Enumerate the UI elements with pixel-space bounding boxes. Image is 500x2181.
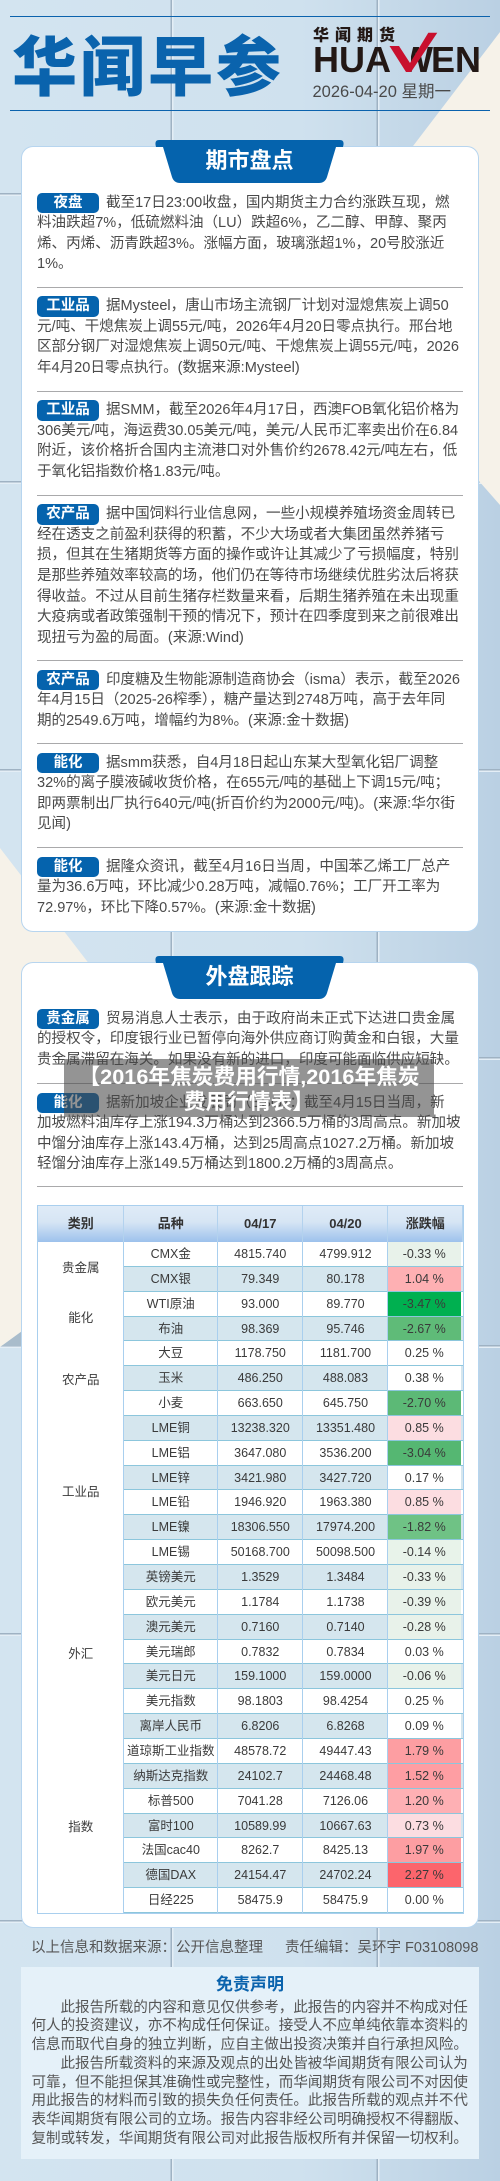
row: 布油	[124, 1317, 462, 1341]
row: 澳元美元: 澳元美元	[146, 1620, 196, 1634]
row: 布油: -2.67 %	[403, 1322, 446, 1336]
disclaimer text: 此报告所载的内容和意见仅供参考，此报告的内容并不构成对任	[60, 2000, 468, 2016]
row: 标普500	[124, 1789, 462, 1814]
row: 日经225: 0.00 %	[405, 1893, 444, 1907]
news item: 夜盘: 烯、丙烯、沥青跌超3%。涨幅方面，玻璃涨超1%，20号胶涨近	[37, 236, 444, 252]
news item: 农产品 印度糖: 期的2549.6万吨，增幅约为8%。(来源:金十数据)	[37, 713, 349, 729]
row: 富时100: 富时100	[148, 1819, 194, 1833]
disclaimer text: 信息而取代自身的独立判断，应自主做出投资决策并自行承担风险。	[32, 2037, 468, 2053]
news item: 夜盘	[37, 193, 450, 272]
row: 德国DAX: 2.27 %	[405, 1868, 444, 1882]
row: 玉米: 玉米	[158, 1371, 183, 1385]
table group: 农产品	[38, 1341, 462, 1416]
row: LME铜: 13238.320	[231, 1421, 290, 1435]
row: 富时100: 10667.63	[319, 1819, 372, 1833]
row: 美元指数: 98.4254	[323, 1694, 368, 1708]
row: LME铜: LME铜	[152, 1421, 190, 1435]
table header: 04/20	[329, 1216, 362, 1231]
row: LME镍: 18306.550	[231, 1520, 290, 1534]
row: 大豆	[124, 1341, 462, 1366]
row: LME锌: 0.17 %	[405, 1471, 444, 1485]
table group: 外汇: 外汇	[68, 1647, 93, 1661]
row: 玉米: 0.38 %	[405, 1371, 444, 1385]
row: 美元日元: 159.1000	[234, 1669, 286, 1683]
news item: 能化 新加坡: 中馏分油库存上涨143.4万桶，达到25周高点1027.2万桶。新加坡	[37, 1136, 454, 1152]
row: LME铅: 0.85 %	[405, 1495, 444, 1509]
row: LME镍: 17974.200	[316, 1520, 375, 1534]
news item: 能化 苯乙烯: 72.97%，环比下降0.57%。(来源:金十数据)	[37, 900, 316, 916]
news item: 工业品 SMM: 306美元/吨，海运费30.05美元/吨，美元/人民币汇率卖出价在6.84	[37, 423, 458, 439]
news item: 能化 新加坡	[37, 1093, 461, 1172]
row: 法国cac40: 8262.7	[241, 1843, 279, 1857]
overlay caption	[64, 1059, 434, 1117]
row: 英镑美元: 1.3529	[241, 1570, 279, 1584]
logo: Huawen Futures	[313, 22, 481, 80]
row: 美元日元	[124, 1664, 462, 1689]
table header	[38, 1206, 462, 1242]
news item: 农产品 饲料: 大疫病或者政策强制干预的情况下，预计在四季度到来之前很难出	[37, 609, 459, 625]
news item: 能化 苯乙烯: 据隆众资讯，截至4月16日当周，中国苯乙烯工厂总产	[106, 859, 450, 875]
news item: 工业品 SMM: 工业品	[46, 402, 90, 418]
table header: 类别	[68, 1216, 94, 1231]
row: CMX银: 1.04 %	[405, 1272, 444, 1286]
row: CMX金: CMX金	[151, 1247, 191, 1261]
row: LME铅: 1946.920	[234, 1495, 286, 1509]
news item: 农产品 印度糖: 印度糖及生物能源制造商协会（isma）表示，截至2026	[106, 672, 460, 688]
row: 小麦: 663.650	[238, 1396, 283, 1410]
news item: 农产品 印度糖	[37, 670, 460, 729]
row: 纳斯达克指数: 纳斯达克指数	[133, 1769, 208, 1783]
table header: 04/17	[244, 1216, 277, 1231]
row: 标普500: 7041.28	[238, 1794, 283, 1808]
row: WTI原油: WTI原油	[147, 1297, 195, 1311]
row: 美元指数: 0.25 %	[405, 1694, 444, 1708]
news item: 夜盘: 1%。	[37, 256, 73, 272]
news item: 贵金属	[37, 1009, 459, 1068]
row: CMX银	[124, 1267, 462, 1292]
row: CMX金: 4815.740	[234, 1247, 286, 1261]
row: CMX金	[124, 1242, 462, 1267]
row: LME锌	[124, 1466, 462, 1490]
row: LME锡	[124, 1540, 462, 1565]
news item: 能化 烧碱: 据smm获悉，自4月18日起山东某大型氧化铝厂调整	[106, 755, 438, 771]
row: 道琼斯工业指数	[124, 1739, 462, 1764]
row: 纳斯达克指数: 1.52 %	[405, 1769, 444, 1783]
row: 小麦: -2.70 %	[403, 1396, 446, 1410]
news item: 贵金属: 的授权令，印度银行业已暂停向海外供应商订购黄金和白银，大量	[37, 1031, 459, 1047]
news item: 工业品 SMM: 据SMM，截至2026年4月17日，西澳FOB氧化铝价格为	[106, 402, 459, 418]
table header: 品种	[158, 1216, 184, 1231]
panel: disclaimer	[21, 1967, 479, 2159]
table group: 农产品: 农产品	[62, 1373, 100, 1387]
row: 大豆: 1178.750	[235, 1346, 286, 1360]
row: 澳元美元: -0.28 %	[403, 1620, 446, 1634]
row: 布油: 98.369	[241, 1322, 279, 1336]
news item: 农产品 印度糖: 年4月15日（2025-26榨季），糖产量达到2748万吨，高于去年同	[37, 692, 445, 708]
source credit: 以上信息和数据来源：公开信息整理	[31, 1940, 263, 1956]
disclaimer text: 何人的投资建议，亦不构成任何保证。接受人不应单纯依靠本资料的	[32, 2018, 468, 2034]
row: 美元瑞郎: 0.03 %	[405, 1645, 444, 1659]
row: 德国DAX: 24154.47	[234, 1868, 286, 1882]
row: WTI原油: -3.47 %	[403, 1297, 446, 1311]
row: 德国DAX: 24702.24	[319, 1868, 372, 1882]
disclaimer text: 表华闻期货有限公司的立场。报告内容非经公司明确授权不得翻版、	[32, 2112, 468, 2128]
row: 英镑美元: -0.33 %	[403, 1570, 446, 1584]
news item: 能化 新加坡: 轻馏分油库存上涨149.5万桶达到1800.2万桶的3周高点。	[37, 1156, 402, 1172]
heading tab: 外盘跟踪: 外盘跟踪	[205, 964, 294, 989]
news item: 农产品 饲料: 是那些养殖效率较高的场，他们仍在等待市场继续优胜劣汰后将获	[37, 568, 459, 584]
row: LME锡: -0.14 %	[403, 1545, 446, 1559]
row: LME镍: -1.82 %	[403, 1520, 446, 1534]
row: LME锡: 50168.700	[231, 1545, 290, 1559]
disclaimer text: 此报告所载资料的来源及观点的出处皆被华闻期货有限公司认为	[60, 2056, 468, 2072]
news item: 能化 烧碱: 32%的离子膜液碱收货价格，在655元/吨的基础上下调15元/吨；	[37, 775, 449, 791]
row: 富时100	[124, 1814, 462, 1838]
row: 美元日元: 159.0000	[319, 1669, 372, 1683]
row: 标普500: 1.20 %	[405, 1794, 444, 1808]
row: LME铝: -3.04 %	[403, 1446, 446, 1460]
row: CMX银: 80.178	[326, 1272, 365, 1286]
row: 日经225	[124, 1888, 462, 1913]
row: 美元瑞郎: 0.7834	[326, 1645, 365, 1659]
row: 法国cac40: 法国cac40	[142, 1843, 200, 1857]
row: 大豆: 大豆	[158, 1346, 183, 1360]
row: 美元瑞郎	[124, 1640, 462, 1664]
row: 美元瑞郎: 0.7832	[241, 1645, 279, 1659]
row: 离岸人民币: 6.8206	[241, 1719, 279, 1733]
heading tab: 期市盘点: 期市盘点	[205, 148, 294, 173]
title: 华闻早参	[12, 15, 284, 109]
row: 美元指数	[124, 1689, 462, 1714]
news item: 能化 新加坡: 据新加坡企业发展局（ESG）：截至4月15日当周，新	[106, 1095, 445, 1111]
row: 美元指数: 美元指数	[146, 1694, 196, 1708]
row: CMX金: -0.33 %	[403, 1247, 446, 1261]
row: 法国cac40: 8425.13	[323, 1843, 368, 1857]
row: 布油: 布油	[158, 1322, 183, 1336]
row: 离岸人民币	[124, 1714, 462, 1739]
row: 纳斯达克指数: 24468.48	[319, 1769, 372, 1783]
news item: 工业品 SMM: 附近，该价格折合国内主流港口对外售价约2678.42元/吨左右，低	[37, 443, 457, 459]
row: 澳元美元: 0.7160	[241, 1620, 279, 1634]
row: WTI原油	[124, 1292, 462, 1317]
row: LME铝: LME铝	[152, 1446, 190, 1460]
row: LME锌: 3421.980	[234, 1471, 286, 1485]
row: LME铜: 0.85 %	[405, 1421, 444, 1435]
news item: 能化 新加坡: 加坡燃料油库存上涨194.3万桶达到2366.5万桶的3周高点。新加坡	[37, 1115, 461, 1131]
row: LME铅: LME铅	[152, 1495, 190, 1509]
data table	[38, 1206, 462, 1913]
row: 美元瑞郎: 美元瑞郎	[146, 1645, 196, 1659]
disclaimer text: 可靠，但不能担保其准确性或完整性，而华闻期货有限公司不对因使	[32, 2074, 468, 2090]
news item: 能化 苯乙烯	[37, 857, 450, 916]
news item: 工业品 SMM: 于氧化铝指数价格1.83元/吨。	[37, 464, 229, 480]
row: 道琼斯工业指数: 49447.43	[319, 1744, 372, 1758]
table group: 指数: 指数	[68, 1820, 93, 1834]
row: 欧元美元: -0.39 %	[403, 1595, 446, 1609]
row: 玉米: 488.083	[323, 1371, 368, 1385]
row: LME铝: 3536.200	[319, 1446, 372, 1460]
news item: 能化 烧碱: 即两票制出厂执行640元/吨(折百价约为2000元/吨)。(来源:华尔街	[37, 796, 455, 812]
row: 欧元美元: 1.1784	[241, 1595, 279, 1609]
row: 英镑美元	[124, 1565, 462, 1590]
row: 玉米: 486.250	[238, 1371, 283, 1385]
row: 日经225: 58475.9	[323, 1893, 368, 1907]
row: LME锌: 3427.720	[319, 1471, 372, 1485]
news item: 农产品 饲料: 得收益。不过从目前生猪存栏数量来看，后期生猪养殖在未出现重	[37, 589, 459, 605]
news item: 能化 新加坡: 能化	[54, 1095, 82, 1111]
disclaimer text: 用此报告的材料而引致的损失负任何责任。此报告所载的观点并不代	[32, 2093, 468, 2109]
row: 离岸人民币: 离岸人民币	[139, 1719, 202, 1733]
news item: 贵金属: 贸易消息人士表示，由于政府尚未正式下达进口贵金属	[106, 1011, 455, 1027]
logo: Huawen Futures: W	[399, 39, 433, 80]
row: WTI原油: 93.000	[241, 1297, 279, 1311]
news item: 农产品 饲料	[37, 504, 459, 646]
row: 法国cac40	[124, 1838, 462, 1863]
news item: 工业品 Mysteel: 据Mysteel，唐山市场主流钢厂计划对湿熄焦炭上调50	[106, 298, 449, 314]
table group: 指数	[38, 1739, 462, 1913]
panel: 期市盘点	[22, 147, 478, 931]
row: 美元指数: 98.1803	[238, 1694, 283, 1708]
news item: 能化 烧碱: 能化	[54, 755, 82, 771]
news item: 工业品 Mysteel	[37, 296, 459, 376]
row: 布油: 95.746	[326, 1322, 365, 1336]
row: 富时100: 10589.99	[234, 1819, 286, 1833]
news item: 能化 苯乙烯: 量为36.6万吨，环比减少0.28万吨，减幅0.76%；工厂开工率为	[37, 879, 440, 895]
row: LME镍	[124, 1515, 462, 1540]
row: 德国DAX: 德国DAX	[145, 1868, 196, 1882]
row: LME锡: 50098.500	[316, 1545, 375, 1559]
row: 标普500: 7126.06	[323, 1794, 368, 1808]
row: 大豆: 1181.700	[320, 1346, 371, 1360]
row: 小麦: 645.750	[323, 1396, 368, 1410]
row: 小麦: 小麦	[158, 1396, 183, 1410]
row: WTI原油: 89.770	[326, 1297, 365, 1311]
table group: 外汇	[38, 1565, 462, 1739]
row: 欧元美元: 欧元美元	[146, 1595, 196, 1609]
news item: 工业品 Mysteel: 年4月20日零点执行。(数据来源:Mysteel)	[37, 360, 300, 376]
disclaimer heading: 免责声明	[216, 1975, 284, 1994]
row: 澳元美元: 0.7140	[326, 1620, 365, 1634]
news item: 工业品 Mysteel: 区部分钢厂对湿熄焦炭上调50元/吨、干熄焦炭上调55元/吨，2026	[37, 339, 459, 355]
overlay caption: 【2016年焦炭费用行情,2016年焦炭	[78, 1064, 420, 1089]
row: CMX金: 4799.912	[319, 1247, 372, 1261]
news item: 能化 苯乙烯: 能化	[54, 859, 82, 875]
overlay caption: 费用行情表】	[184, 1089, 314, 1114]
table group: 工业品	[38, 1416, 462, 1565]
news item: 农产品 饲料: 现扭亏为盈的局面。(来源:Wind)	[37, 630, 244, 646]
news item: 农产品 饲料: 损，但其在生猪期货等方面的操作或许让其减少了亏损幅度，特别	[37, 547, 459, 563]
row: LME铜	[124, 1416, 462, 1441]
row: 道琼斯工业指数: 道琼斯工业指数	[127, 1744, 214, 1758]
news item: 农产品 饲料: 经在透支之前盈利获得的积蓄，不少大场或者大集团虽然养猪亏	[37, 527, 444, 543]
row: 欧元美元	[124, 1590, 462, 1615]
row: 道琼斯工业指数: 48578.72	[234, 1744, 286, 1758]
row: LME铝	[124, 1441, 462, 1466]
table group: 贵金属	[38, 1242, 462, 1292]
row: 澳元美元	[124, 1615, 462, 1640]
row: 道琼斯工业指数: 1.79 %	[405, 1744, 444, 1758]
row: LME镍: LME镍	[152, 1520, 190, 1534]
news item: 工业品 Mysteel: 工业品	[46, 298, 90, 314]
heading tab: 期市盘点	[155, 140, 344, 183]
row: CMX银: CMX银	[151, 1272, 191, 1286]
news item: 农产品 饲料: 农产品	[46, 506, 90, 522]
logo: Huawen Futures: EN	[431, 39, 481, 80]
row: 美元日元: -0.06 %	[403, 1669, 446, 1683]
table header: 涨跌幅	[406, 1216, 445, 1231]
news item: 农产品 饲料: 据中国饲料行业信息网，一些小规模养殖场资金周转已	[106, 506, 455, 522]
table group: 贵金属: 贵金属	[62, 1261, 100, 1275]
row: 英镑美元: 1.3484	[326, 1570, 365, 1584]
row: LME铅	[124, 1490, 462, 1515]
row: CMX银: 79.349	[241, 1272, 279, 1286]
row: 小麦	[124, 1391, 462, 1416]
row: 玉米	[124, 1366, 462, 1391]
news item: 夜盘: 夜盘	[54, 195, 82, 211]
row: 法国cac40: 1.97 %	[405, 1843, 444, 1857]
logo: Huawen Futures: HUA	[313, 39, 391, 80]
row: LME铅: 1963.380	[319, 1495, 372, 1509]
row: 英镑美元: 英镑美元	[146, 1570, 196, 1584]
date: 2026-04-20 星期一	[312, 83, 451, 101]
editor credit: 责任编辑：吴环宇 F03108098	[285, 1940, 478, 1956]
news item: 能化 烧碱	[37, 753, 455, 832]
news item: 贵金属: 贵金属滞留在海关。如果没有新的进口，印度可能面临供应短缺。	[37, 1052, 459, 1068]
row: LME锡: LME锡	[152, 1545, 190, 1559]
disclaimer text	[32, 1999, 468, 2147]
disclaimer text: 复制或转发，华闻期货有限公司对此报告版权所有并保留一切权利。	[32, 2131, 468, 2147]
row: 日经225: 58475.9	[238, 1893, 283, 1907]
logo: Huawen Futures: 华闻期货	[313, 22, 401, 46]
panel: 外盘跟踪	[22, 963, 478, 1927]
row: 标普500: 标普500	[148, 1794, 194, 1808]
row: 德国DAX	[124, 1863, 462, 1888]
news item: 夜盘: 截至17日23:00收盘，国内期货主力合约涨跌互现，燃	[106, 195, 450, 211]
row: LME锌: LME锌	[152, 1471, 190, 1485]
news item: 工业品 SMM	[37, 400, 459, 480]
row: 美元日元: 美元日元	[146, 1669, 196, 1683]
table group: 工业品: 工业品	[62, 1485, 100, 1499]
row: 欧元美元: 1.1738	[326, 1595, 365, 1609]
row: 离岸人民币: 6.8268	[326, 1719, 365, 1733]
row: 纳斯达克指数: 24102.7	[238, 1769, 283, 1783]
row: 大豆: 0.25 %	[405, 1346, 444, 1360]
table group: 能化	[38, 1292, 462, 1341]
row: 纳斯达克指数	[124, 1764, 462, 1789]
news item: 夜盘: 料油跌超7%，低硫燃料油（LU）跌超6%，乙二醇、甲醇、聚丙	[37, 215, 447, 231]
news item: 工业品 Mysteel: 元/吨、干熄焦炭上调55元/吨，2026年4月20日零点执行。邢台地	[37, 319, 452, 335]
table group: 能化: 能化	[68, 1311, 93, 1325]
row: LME铜: 13351.480	[316, 1421, 375, 1435]
row: 富时100: 0.73 %	[405, 1819, 444, 1833]
news item: 贵金属: 贵金属	[46, 1011, 90, 1027]
heading tab: 外盘跟踪	[155, 956, 344, 999]
row: LME铝: 3647.080	[234, 1446, 286, 1460]
news item: 能化 烧碱: 见闻)	[37, 816, 71, 832]
row: 离岸人民币: 0.09 %	[405, 1719, 444, 1733]
news item: 农产品 印度糖: 农产品	[46, 672, 90, 688]
row: 日经225: 日经225	[148, 1893, 194, 1907]
